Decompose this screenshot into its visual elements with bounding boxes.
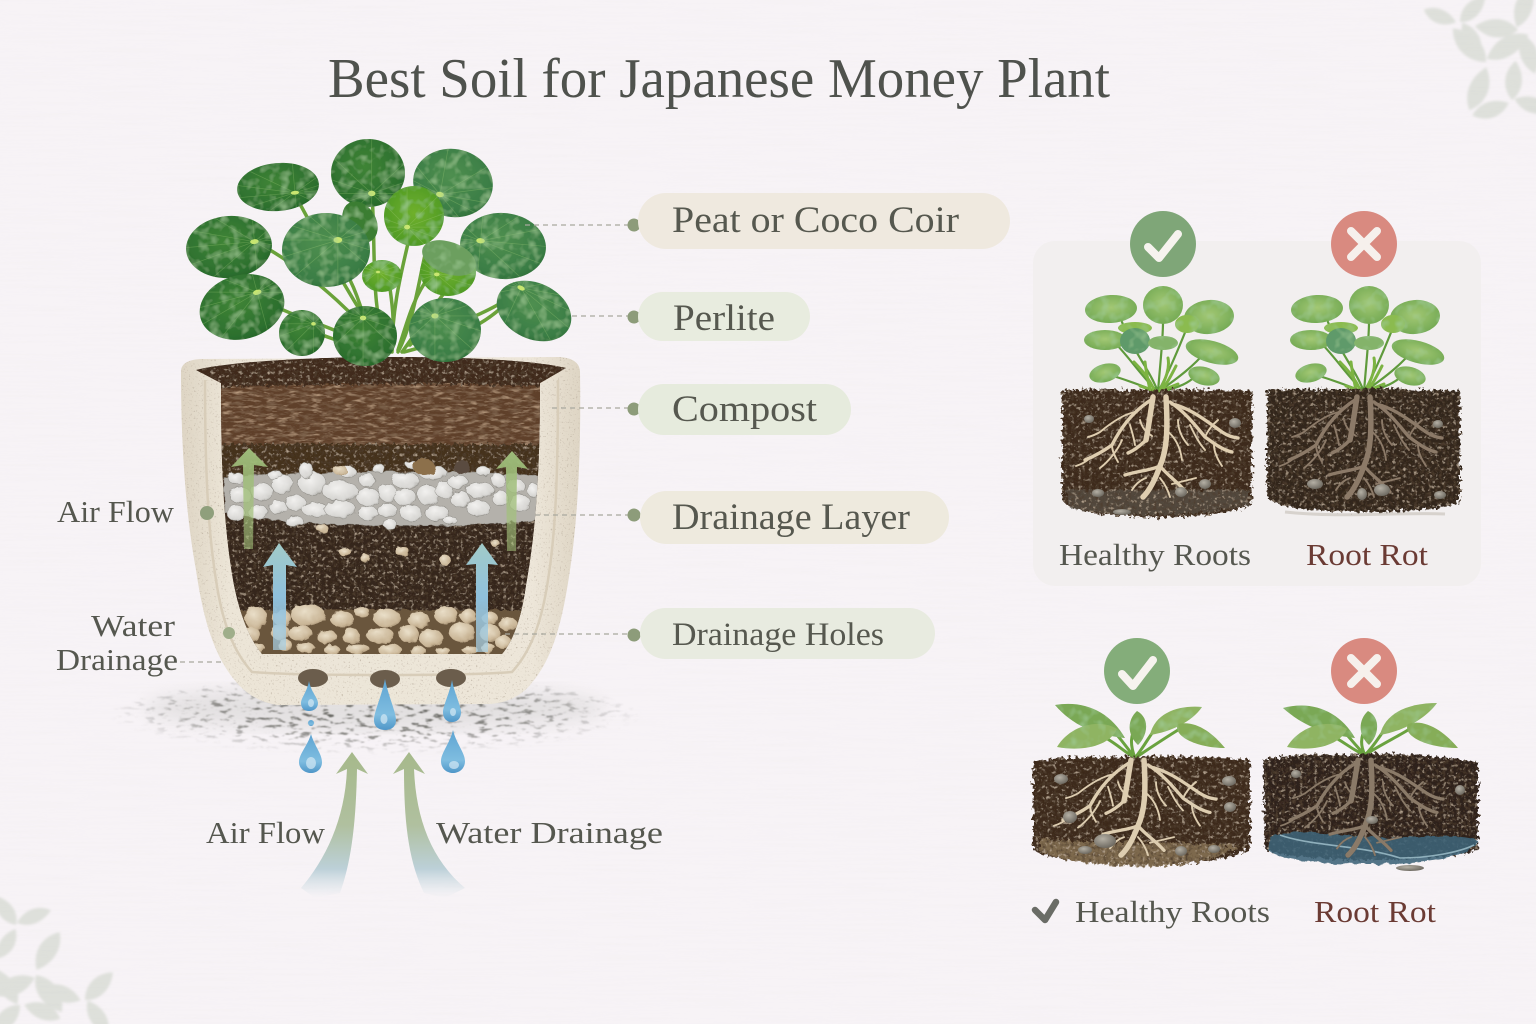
label: peat or coco coir bbox=[525, 193, 1010, 249]
icon: healthy check bbox=[1130, 211, 1196, 277]
air arrow inside pot right bbox=[496, 451, 528, 551]
bottom label: air flow: Air Flow bbox=[206, 815, 326, 850]
big air flow arrow bbox=[301, 752, 368, 898]
label: compost bbox=[552, 384, 851, 435]
plant in pot bbox=[186, 139, 572, 366]
dark compost band bbox=[190, 444, 570, 479]
coir top layer bbox=[212, 378, 548, 448]
root rot plant with pointed leaves and water bbox=[1263, 703, 1478, 871]
left label: water drainage: Drainage bbox=[56, 642, 178, 677]
pooled water bbox=[1268, 832, 1477, 864]
perlite layer bbox=[224, 461, 540, 529]
icon: healthy check bbox=[1104, 638, 1170, 704]
label: drainage holes: Drainage Holes bbox=[672, 617, 884, 653]
gravel layer bbox=[240, 604, 522, 654]
root rot plant with roots bbox=[1267, 286, 1460, 515]
ground shadow under pot bbox=[105, 676, 645, 764]
label: peat or coco coir: Peat or Coco Coir bbox=[672, 200, 959, 241]
panel: upper comparison bbox=[1033, 211, 1481, 586]
panel: lower comparison bbox=[1033, 638, 1478, 929]
pot shell bbox=[181, 357, 580, 705]
healthy plant with pointed leaves bbox=[1033, 704, 1250, 866]
pot cross-section bbox=[181, 345, 580, 705]
healthy plant with roots bbox=[1062, 286, 1252, 517]
soil and layers bbox=[190, 345, 570, 665]
label: drainage layer: Drainage Layer bbox=[672, 497, 910, 538]
water drops bbox=[299, 679, 465, 773]
big water drainage arrow bbox=[393, 752, 465, 898]
label: drainage holes bbox=[505, 608, 935, 659]
bottom label: water drainage: Water Drainage bbox=[436, 815, 663, 850]
text: healthy roots: Healthy Roots bbox=[1075, 894, 1270, 929]
icon: small check bbox=[1035, 902, 1056, 920]
stems bbox=[262, 195, 513, 352]
title: Best Soil for Japanese Money Plant bbox=[328, 48, 1110, 110]
text: root rot: Root Rot bbox=[1306, 537, 1428, 572]
label: perlite bbox=[572, 292, 810, 341]
text: healthy roots: Healthy Roots bbox=[1059, 537, 1251, 572]
pot inner wall shading bbox=[205, 380, 558, 675]
surface soil bbox=[190, 357, 570, 388]
left label: water drainage bbox=[56, 608, 235, 677]
text: root rot: Root Rot bbox=[1314, 894, 1436, 929]
icon: root rot cross bbox=[1331, 638, 1397, 704]
air arrow inside pot left bbox=[231, 448, 268, 549]
leaves bbox=[186, 139, 572, 366]
label: compost: Compost bbox=[672, 389, 818, 430]
dark soil layer bbox=[226, 518, 535, 616]
left label: water drainage: Water bbox=[91, 608, 176, 643]
soil background bbox=[190, 345, 570, 665]
decorative corner leaves top right bbox=[1424, 0, 1536, 141]
decorative corner leaves bottom left bbox=[0, 880, 139, 1024]
label: drainage layer bbox=[535, 491, 949, 544]
icon: root rot cross bbox=[1331, 211, 1397, 277]
label: perlite: Perlite bbox=[673, 298, 775, 339]
small stones in soil bbox=[316, 459, 499, 565]
drainage holes bbox=[298, 669, 466, 688]
water arrow inside pot right bbox=[466, 543, 498, 652]
left label: air flow: Air Flow bbox=[57, 494, 175, 529]
water arrow inside pot left bbox=[263, 543, 297, 650]
